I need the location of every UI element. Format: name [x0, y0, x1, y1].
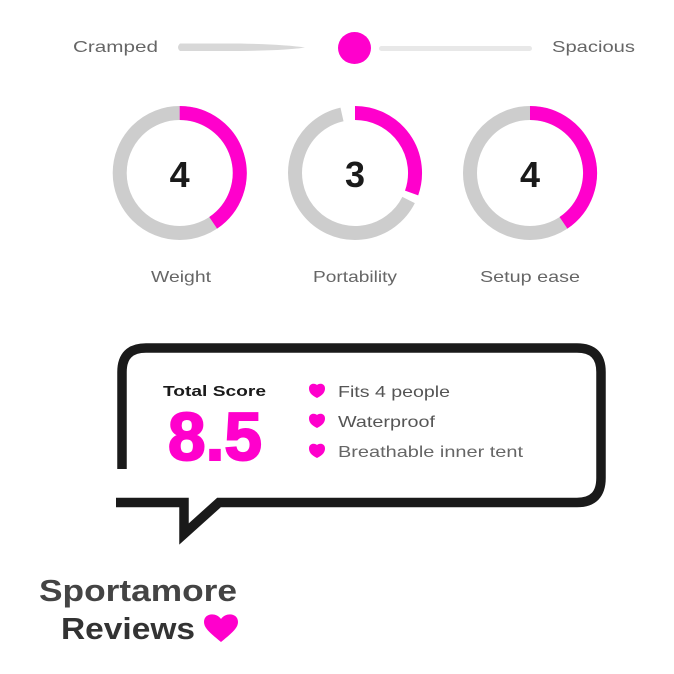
bubble outline: [116, 348, 601, 534]
gauge: Portability: [295, 113, 415, 286]
speech bubble panel: [116, 348, 601, 534]
gauge number: 4: [170, 154, 190, 195]
total score value: 8.5: [168, 399, 262, 475]
slider: Cramped to Spacious: [73, 32, 635, 64]
gauge number: 4: [520, 154, 540, 195]
gauge value arc: [355, 113, 415, 193]
gauge value arc: [530, 113, 590, 223]
feature text: Waterproof: [338, 414, 436, 431]
total score heading: Total Score: [163, 383, 266, 400]
icon: heart bullet: [309, 444, 325, 458]
gauge: Weight: [120, 113, 240, 286]
slider knob: [338, 32, 371, 64]
gauge label: Weight: [151, 269, 212, 286]
gauge value arc: [180, 113, 240, 223]
slider track left: [178, 44, 305, 51]
gauge track: [120, 113, 240, 233]
icon: heart bullet: [309, 384, 325, 398]
feature text: Fits 4 people: [338, 384, 450, 401]
brand line 2: Reviews: [61, 611, 195, 646]
icon: heart: [204, 614, 238, 642]
gauge label: Portability: [313, 269, 397, 286]
brand line 1: Sportamore: [39, 573, 237, 608]
feature text: Breathable inner tent: [338, 444, 524, 461]
gauge label: Setup ease: [480, 269, 580, 286]
feature list: [309, 384, 524, 461]
gauge track: [295, 114, 409, 233]
slider track right: [379, 46, 532, 51]
gauge: Setup ease: [470, 113, 590, 286]
gauge number: 3: [345, 154, 365, 195]
brand logo: Sportamore Reviews: [39, 573, 238, 646]
gauge track: [470, 113, 590, 233]
icon: heart bullet: [309, 414, 325, 428]
label: Spacious: Spacious: [552, 39, 635, 56]
label: Cramped: Cramped: [73, 39, 158, 56]
